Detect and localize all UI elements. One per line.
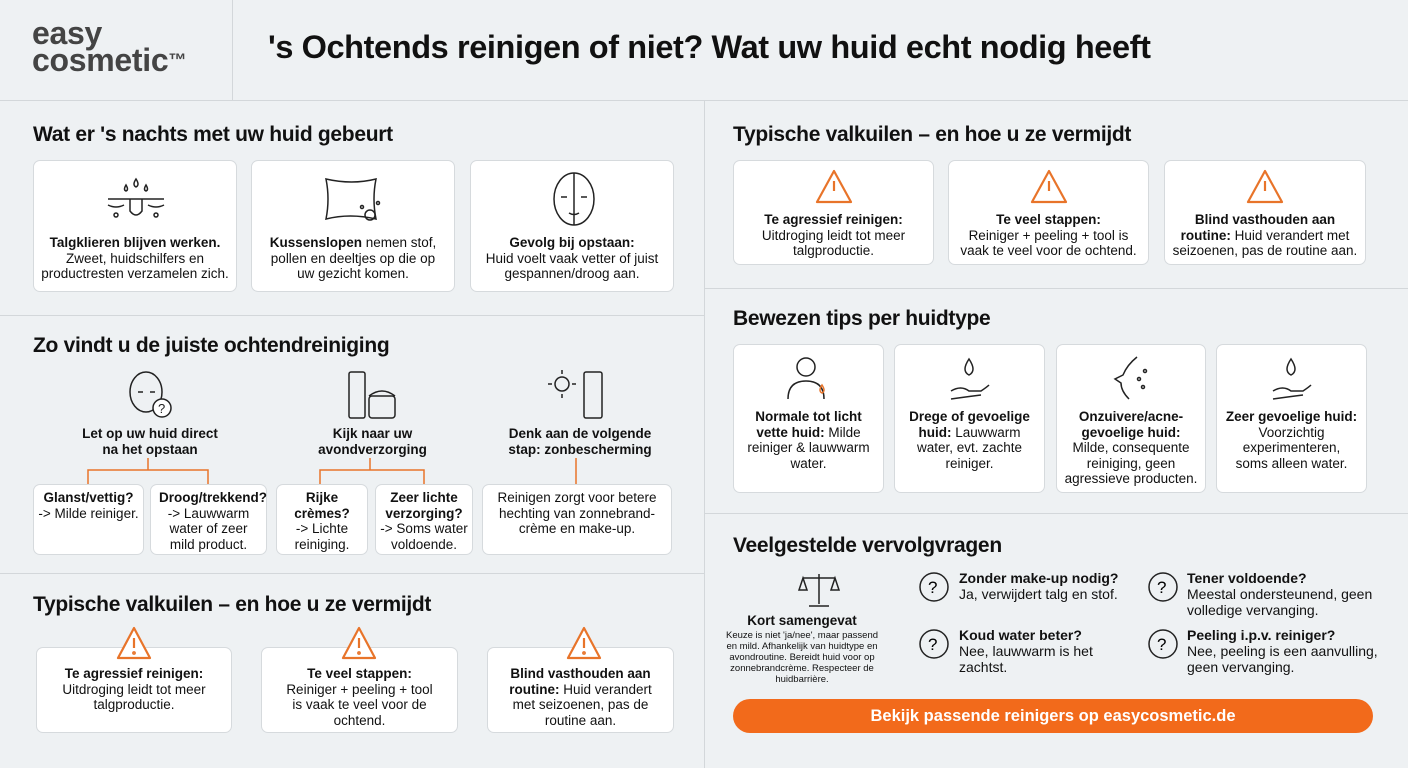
box: zeer lichte: Zeer lichte verzorging? <box>385 490 463 520</box>
faq 2: Koud water beter? <box>959 627 1082 643</box>
summary: Keuze is niet 'ja/nee', maar passend en mild. Afhankelijk van huidtype en avondroutine. Bereidt huid voor op zonnebrandcrème. Respecteer de huidbarrière. <box>726 630 878 685</box>
heading: Typische valkuilen – en hoe u ze vermijdt <box>733 123 1131 146</box>
box: glanst: -> Milde reiniger. <box>38 506 139 520</box>
faq 3: Meestal ondersteunend, geen volledige vervanging. <box>1187 586 1372 618</box>
heading: Bewezen tips per huidtype <box>733 307 990 330</box>
logo <box>32 15 186 78</box>
icon: skin drops <box>108 178 164 218</box>
label: avondverzorging: Kijk naar uw <box>333 426 412 441</box>
icon: person <box>787 357 825 399</box>
card: gevolg: Huid voelt vaak vetter of juist gespannen/droog aan. <box>486 250 658 281</box>
icon: sun tube <box>548 370 603 419</box>
card 1 <box>733 160 934 265</box>
box: droog: -> Lauwwarm water of zeer mild product. <box>168 506 249 552</box>
icon: pillow <box>325 178 380 221</box>
card: gevolg <box>470 160 674 292</box>
connectors <box>87 458 577 484</box>
faq 4: Nee, peeling is een aanvulling, geen vervanging. <box>1187 643 1378 675</box>
faq 3: Tener voldoende? <box>1187 570 1307 586</box>
icon: face question <box>129 371 172 418</box>
faq 4: ? <box>1157 635 1166 654</box>
card normaal <box>733 344 884 493</box>
icon: scale <box>798 574 840 607</box>
card zeer gevoelig <box>1216 344 1367 493</box>
card: gevolg: Gevolg bij opstaan: <box>509 235 635 250</box>
card: kussenslopen <box>251 160 455 292</box>
faq 4 <box>1148 627 1378 675</box>
card 1: Te agressief reinigen: <box>764 212 903 227</box>
faq 1 <box>919 570 1118 602</box>
icon: hand drop <box>950 358 990 400</box>
label: avondverzorging: avondverzorging <box>318 442 427 456</box>
faq 2: Nee, lauwwarm is het zachtst. <box>959 643 1093 675</box>
card 3 <box>1164 160 1366 265</box>
label: huid direct <box>82 426 218 457</box>
card droog: Drege of gevoelige huid: Lauwwarm water, evt. zachte reiniger. <box>909 409 1030 470</box>
card acne: Onzuivere/acne-gevoelige huid: Milde, consequente reiniging, geen agressieve producten. <box>1065 409 1197 486</box>
box: zeer lichte <box>375 484 473 555</box>
box: reinigen zon <box>482 484 672 555</box>
card 2 <box>261 647 458 733</box>
heading: Zo vindt u de juiste ochtendreiniging <box>33 334 389 357</box>
label: avondverzorging <box>318 426 427 457</box>
faq 1: Ja, verwijdert talg en stof. <box>959 586 1118 602</box>
card 2: Te veel stappen: <box>307 666 412 681</box>
label: zonbescherming <box>508 426 652 457</box>
box: glanst <box>33 484 144 555</box>
card acne <box>1056 344 1206 493</box>
button: CTA <box>733 699 1373 733</box>
card 3: Blind vasthouden aan routine: Huid verandert met seizoenen, pas de routine aan. <box>1173 212 1357 258</box>
card droog <box>894 344 1045 493</box>
box: droog: Droog/trekkend? <box>159 490 267 505</box>
card normaal: Normale tot licht vette huid: Milde reiniger & lauwwarm water. <box>747 409 870 470</box>
heading: Typische valkuilen – en hoe u ze vermijdt <box>33 593 431 616</box>
panel: valkuilen right <box>733 123 1366 265</box>
faq 4: Peeling i.p.v. reiniger? <box>1187 627 1335 643</box>
card: kussenslopen: Kussenslopen nemen stof, pollen en deeltjes op die op uw gezicht komen. <box>270 235 436 281</box>
logo: cosmetic™ <box>32 42 186 78</box>
label: zonbescherming: Denk aan de volgende <box>509 426 651 441</box>
box: rijke <box>276 484 368 555</box>
summary: Kort samengevat <box>747 613 857 628</box>
faq 2: ? <box>928 635 937 654</box>
card 1: Uitdroging leidt tot meer talgproductie. <box>62 682 206 712</box>
card 2: Reiniger + peeling + tool is vaak te veel voor de ochtend. <box>960 228 1137 258</box>
button: CTA: Bekijk passende reinigers op easycosmetic.de <box>870 707 1236 725</box>
card 1: Uitdroging leidt tot meer talgproductie. <box>762 228 905 258</box>
box: zeer lichte: -> Soms water voldoende. <box>380 521 468 552</box>
box: rijke: Rijke crèmes? <box>294 490 350 520</box>
card: talgklieren: Zweet, huidschilfers en productresten verzamelen zich. <box>41 250 229 281</box>
panel: tips per huidtype <box>733 307 1367 493</box>
card 2 <box>948 160 1149 265</box>
faq 1: ? <box>928 578 937 597</box>
card 2: Te veel stappen: <box>996 212 1101 227</box>
box: reinigen zon: Reinigen zorgt voor betere hechting van zonnebrand-crème en make-up. <box>497 490 657 536</box>
label: huid direct: Let op uw huid direct <box>82 426 218 441</box>
faq 3: ? <box>1157 578 1166 597</box>
box: glanst: Glanst/vettig? <box>43 490 134 505</box>
icons: warnings <box>116 626 602 660</box>
card: talgklieren <box>33 160 237 292</box>
panel: FAQ <box>726 534 1378 733</box>
icon: face question: ? <box>158 401 165 416</box>
icons: warnings <box>816 170 1284 204</box>
icon: tube jar <box>348 371 396 419</box>
card zeer gevoelig: Zeer gevoelige huid: Voorzichtig experimenteren, soms alleen water. <box>1226 409 1357 470</box>
panel: juiste ochtendreiniging <box>33 334 672 555</box>
card 2: Reiniger + peeling + tool is vaak te veel voor de ochtend. <box>286 682 433 728</box>
icon: face half <box>553 172 595 226</box>
panel: valkuilen left <box>33 593 674 733</box>
box: droog <box>150 484 267 555</box>
card 1: Te agressief reinigen: <box>65 666 203 681</box>
label: huid direct: na het opstaan <box>102 442 198 456</box>
faq 2 <box>919 627 1093 675</box>
heading: night: Wat er 's nachts met uw huid gebeurt <box>33 123 393 146</box>
card 1 <box>36 647 232 733</box>
icon: face profile <box>1114 356 1148 400</box>
title: 's Ochtends reinigen of niet? Wat uw huid echt nodig heeft <box>268 29 1150 65</box>
label: zonbescherming: stap: zonbescherming <box>508 442 652 456</box>
card: talgklieren: Talgklieren blijven werken. <box>50 235 220 250</box>
heading: Veelgestelde vervolgvragen <box>733 534 1002 557</box>
faq 3 <box>1148 570 1372 618</box>
box: rijke: -> Lichte reiniging. <box>295 521 349 552</box>
logo: easy <box>32 15 102 51</box>
card 3 <box>487 647 674 733</box>
faq 1: Zonder make-up nodig? <box>959 570 1118 586</box>
panel: night <box>33 123 674 292</box>
card 3: Blind vasthouden aan routine: Huid verandert met seizoenen, pas de routine aan. <box>509 666 652 728</box>
icon: hand drop <box>1272 358 1312 400</box>
